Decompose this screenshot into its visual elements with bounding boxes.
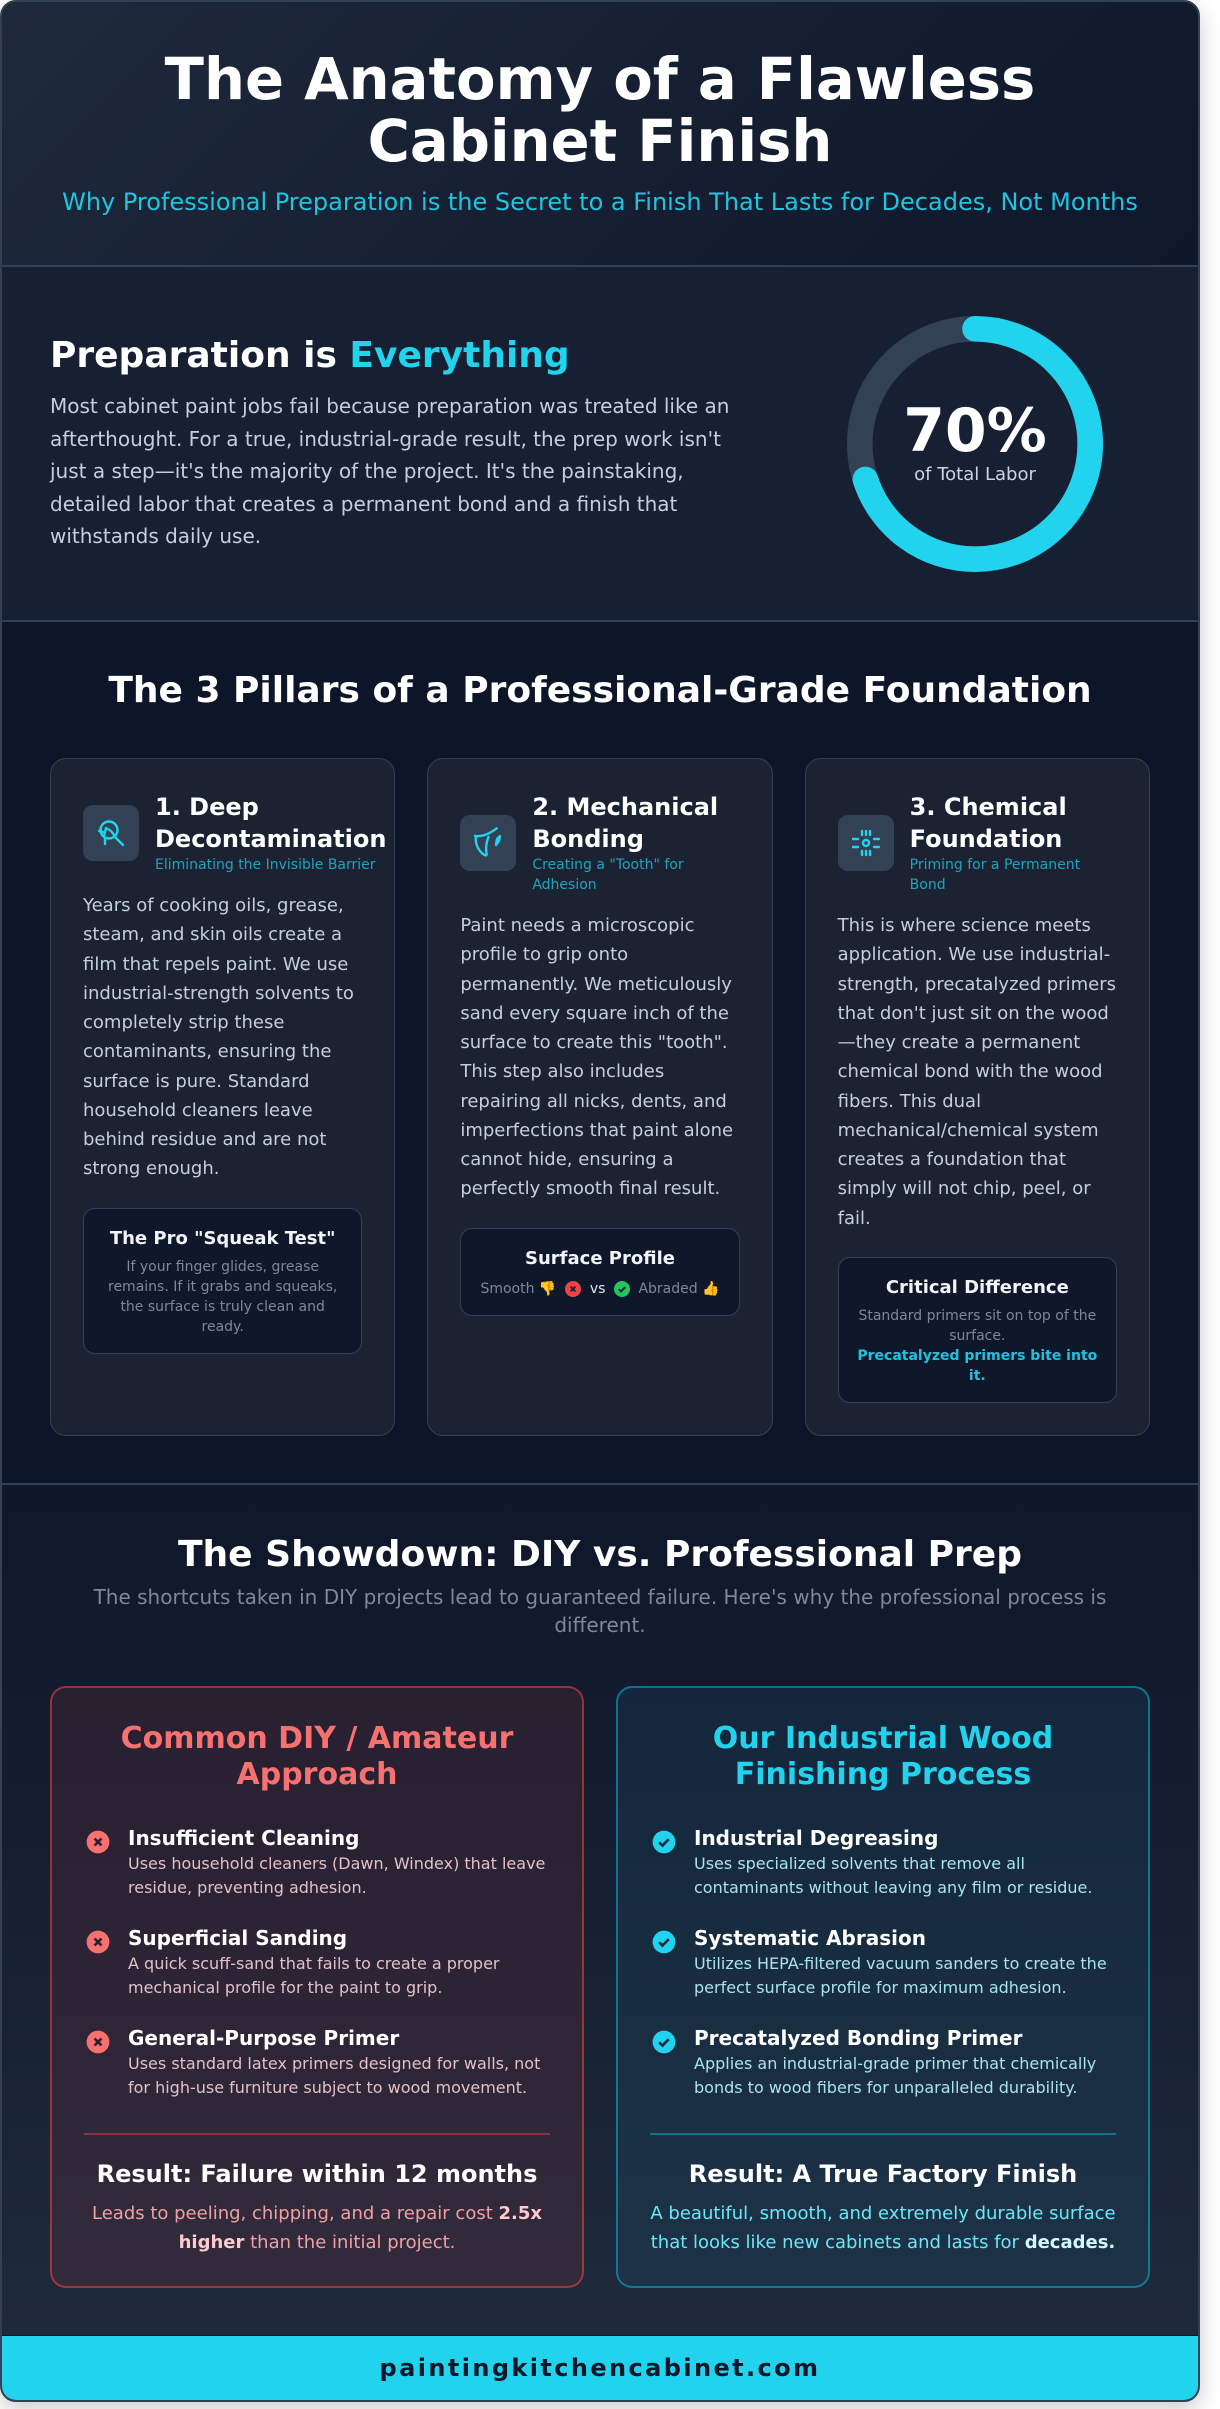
intro text: Most cabinet paint jobs fail because preparation was treated like an afterthought. For a true, industrial-grade result, the prep work isn't just a step—it's the majority of the project. It's the painstaking, detailed labor that creates a permanent bond and a finish that withstands daily use.: [50, 394, 729, 548]
panel: professional process: [616, 1686, 1150, 2288]
title: [164, 46, 1035, 174]
donut label: of Total Labor: [914, 464, 1036, 485]
panel: DIY approach: [50, 1686, 584, 2288]
icon: sander: [460, 815, 516, 871]
comparison row: 👍: [702, 1280, 720, 1296]
comparison columns: [50, 1686, 1150, 2288]
chart: 70 percent donut: [847, 316, 1103, 572]
item: superficial sanding: A quick scuff-sand that fails to create a proper mechanical profile for the paint to grip.: [128, 1954, 500, 1997]
callout: squeak test: The Pro "Squeak Test": [110, 1228, 336, 1248]
item: insufficient cleaning: Insufficient Cleaning: [128, 1826, 359, 1850]
title: Cabinet Finish: [368, 108, 832, 174]
result: factory finish: Result: A True Factory Finish: [689, 2160, 1077, 2188]
card: mechanical bonding: [427, 758, 773, 1436]
item: bonding primer: Precatalyzed Bonding Primer: [694, 2026, 1022, 2050]
item: systematic abrasion: Utilizes HEPA-filtered vacuum sanders to create the perfect surface profile for maximum adhesion.: [694, 1954, 1107, 1997]
heading: preparation is everything: Preparation is Everything: [50, 335, 570, 376]
item: industrial degreasing: Industrial Degreasing: [694, 1826, 938, 1850]
heading: professional: Our Industrial Wood Finishing Process: [713, 1721, 1053, 1792]
card header: 1. Deep Decontamination: [155, 793, 386, 853]
item: systematic abrasion: Systematic Abrasion: [694, 1926, 926, 1950]
item: systematic abrasion: [652, 1926, 1107, 1997]
card header: Eliminating the Invisible Barrier: [155, 857, 376, 873]
subtitle: Why Professional Preparation is the Secret to a Finish That Lasts for Decades, Not Months: [62, 188, 1138, 216]
card header: Priming for a Permanent Bond: [910, 857, 1080, 893]
item: industrial degreasing: [652, 1826, 1092, 1897]
card header: 2. Mechanical Bonding: [532, 793, 718, 853]
item: bonding primer: [652, 2026, 1096, 2097]
card text: Years of cooking oils, grease, steam, and skin oils create a film that repels paint. We use industrial-strength solvents to completely strip these contaminants, ensuring the surface is pure. Standard household cleaners leave behind residue and are not strong enough.: [83, 895, 354, 1179]
donut label: 70%: [903, 396, 1047, 466]
heading: pillars: The 3 Pillars of a Professional-Grade Foundation: [108, 670, 1092, 710]
panel: showdown: [2, 1485, 1198, 2335]
header: [2, 2, 1198, 267]
card text: Paint needs a microscopic profile to grip onto permanently. We meticulously sand every square inch of the surface to create this "tooth". This step also includes repairing all nicks, dents, and imperfections that paint alone cannot hide, ensuring a perfectly smooth final result.: [460, 915, 733, 1199]
title: The Anatomy of a Flawless: [165, 46, 1035, 112]
icon: chemical: [838, 815, 894, 871]
pillar cards: [50, 758, 1150, 1436]
footer: [2, 2336, 1198, 2400]
comparison row: vs: [590, 1280, 605, 1296]
card header: [460, 793, 718, 893]
item: industrial degreasing: Uses specialized solvents that remove all contaminants without leaving any film or residue.: [694, 1854, 1092, 1897]
card header: 3. Chemical Foundation: [910, 793, 1067, 853]
card header: [838, 793, 1080, 893]
footer: paintingkitchencabinet.com: [380, 2354, 820, 2382]
item: general-purpose primer: General-Purpose Primer: [128, 2026, 399, 2050]
card: deep decontamination: [50, 758, 395, 1436]
item: insufficient cleaning: [86, 1826, 545, 1897]
result: factory finish: A beautiful, smooth, and extremely durable surface that looks like new cabinets and lasts for decades.: [650, 2202, 1116, 2253]
icon: magnifier: [83, 805, 139, 861]
callout: surface profile: [460, 1228, 740, 1316]
showdown intro: The shortcuts taken in DIY projects lead to guaranteed failure. Here's why the professional process is different.: [94, 1585, 1106, 1637]
card text: This is where science meets application. We use industrial-strength, precatalyzed primers that don't just sit on the wood—they create a permanent chemical bond with the wood fibers. This dual mechanical/chemical system creates a foundation that simply will not chip, peel, or fail.: [838, 915, 1116, 1228]
item: general-purpose primer: Uses standard latex primers designed for walls, not for high-use furniture subject to wood movement.: [128, 2054, 540, 2097]
item: general-purpose primer: [86, 2026, 540, 2097]
result: failure: [84, 2133, 550, 2257]
callout: critical difference: Precatalyzed primers bite into it.: [857, 1348, 1097, 1384]
panel: three pillars: [2, 622, 1198, 1485]
item: bonding primer: Applies an industrial-grade primer that chemically bonds to wood fibers for unparalleled durability.: [694, 2054, 1096, 2097]
card header: [83, 793, 386, 873]
item: superficial sanding: Superficial Sanding: [128, 1926, 347, 1950]
card header: Creating a "Tooth" for Adhesion: [532, 857, 684, 893]
item: superficial sanding: [86, 1926, 500, 1997]
comparison row: 👎: [539, 1280, 556, 1296]
callout: critical difference: Standard primers sit on top of the surface.: [858, 1308, 1096, 1344]
result: failure: Result: Failure within 12 months: [97, 2160, 537, 2188]
callout: critical difference: [838, 1257, 1117, 1403]
card: chemical foundation: [805, 758, 1150, 1436]
callout: surface profile: Surface Profile: [525, 1248, 675, 1268]
panel: preparation: [2, 267, 1198, 622]
item: insufficient cleaning: Uses household cleaners (Dawn, Windex) that leave residue, preventing adhesion.: [128, 1854, 545, 1897]
heading: DIY: Common DIY / Amateur Approach: [121, 1721, 513, 1792]
callout: squeak test: If your finger glides, grease remains. If it grabs and squeaks, the surface is truly clean and ready.: [108, 1258, 337, 1334]
callout: squeak test: [83, 1208, 362, 1354]
result: factory finish: [650, 2133, 1116, 2257]
callout: critical difference: Critical Difference: [886, 1277, 1069, 1298]
heading: showdown: The Showdown: DIY vs. Professional Prep: [178, 1534, 1022, 1575]
comparison row: Smooth Abraded: [480, 1280, 698, 1296]
result: failure: Leads to peeling, chipping, and a repair cost 2.5x higher than the initial project.: [92, 2202, 542, 2253]
